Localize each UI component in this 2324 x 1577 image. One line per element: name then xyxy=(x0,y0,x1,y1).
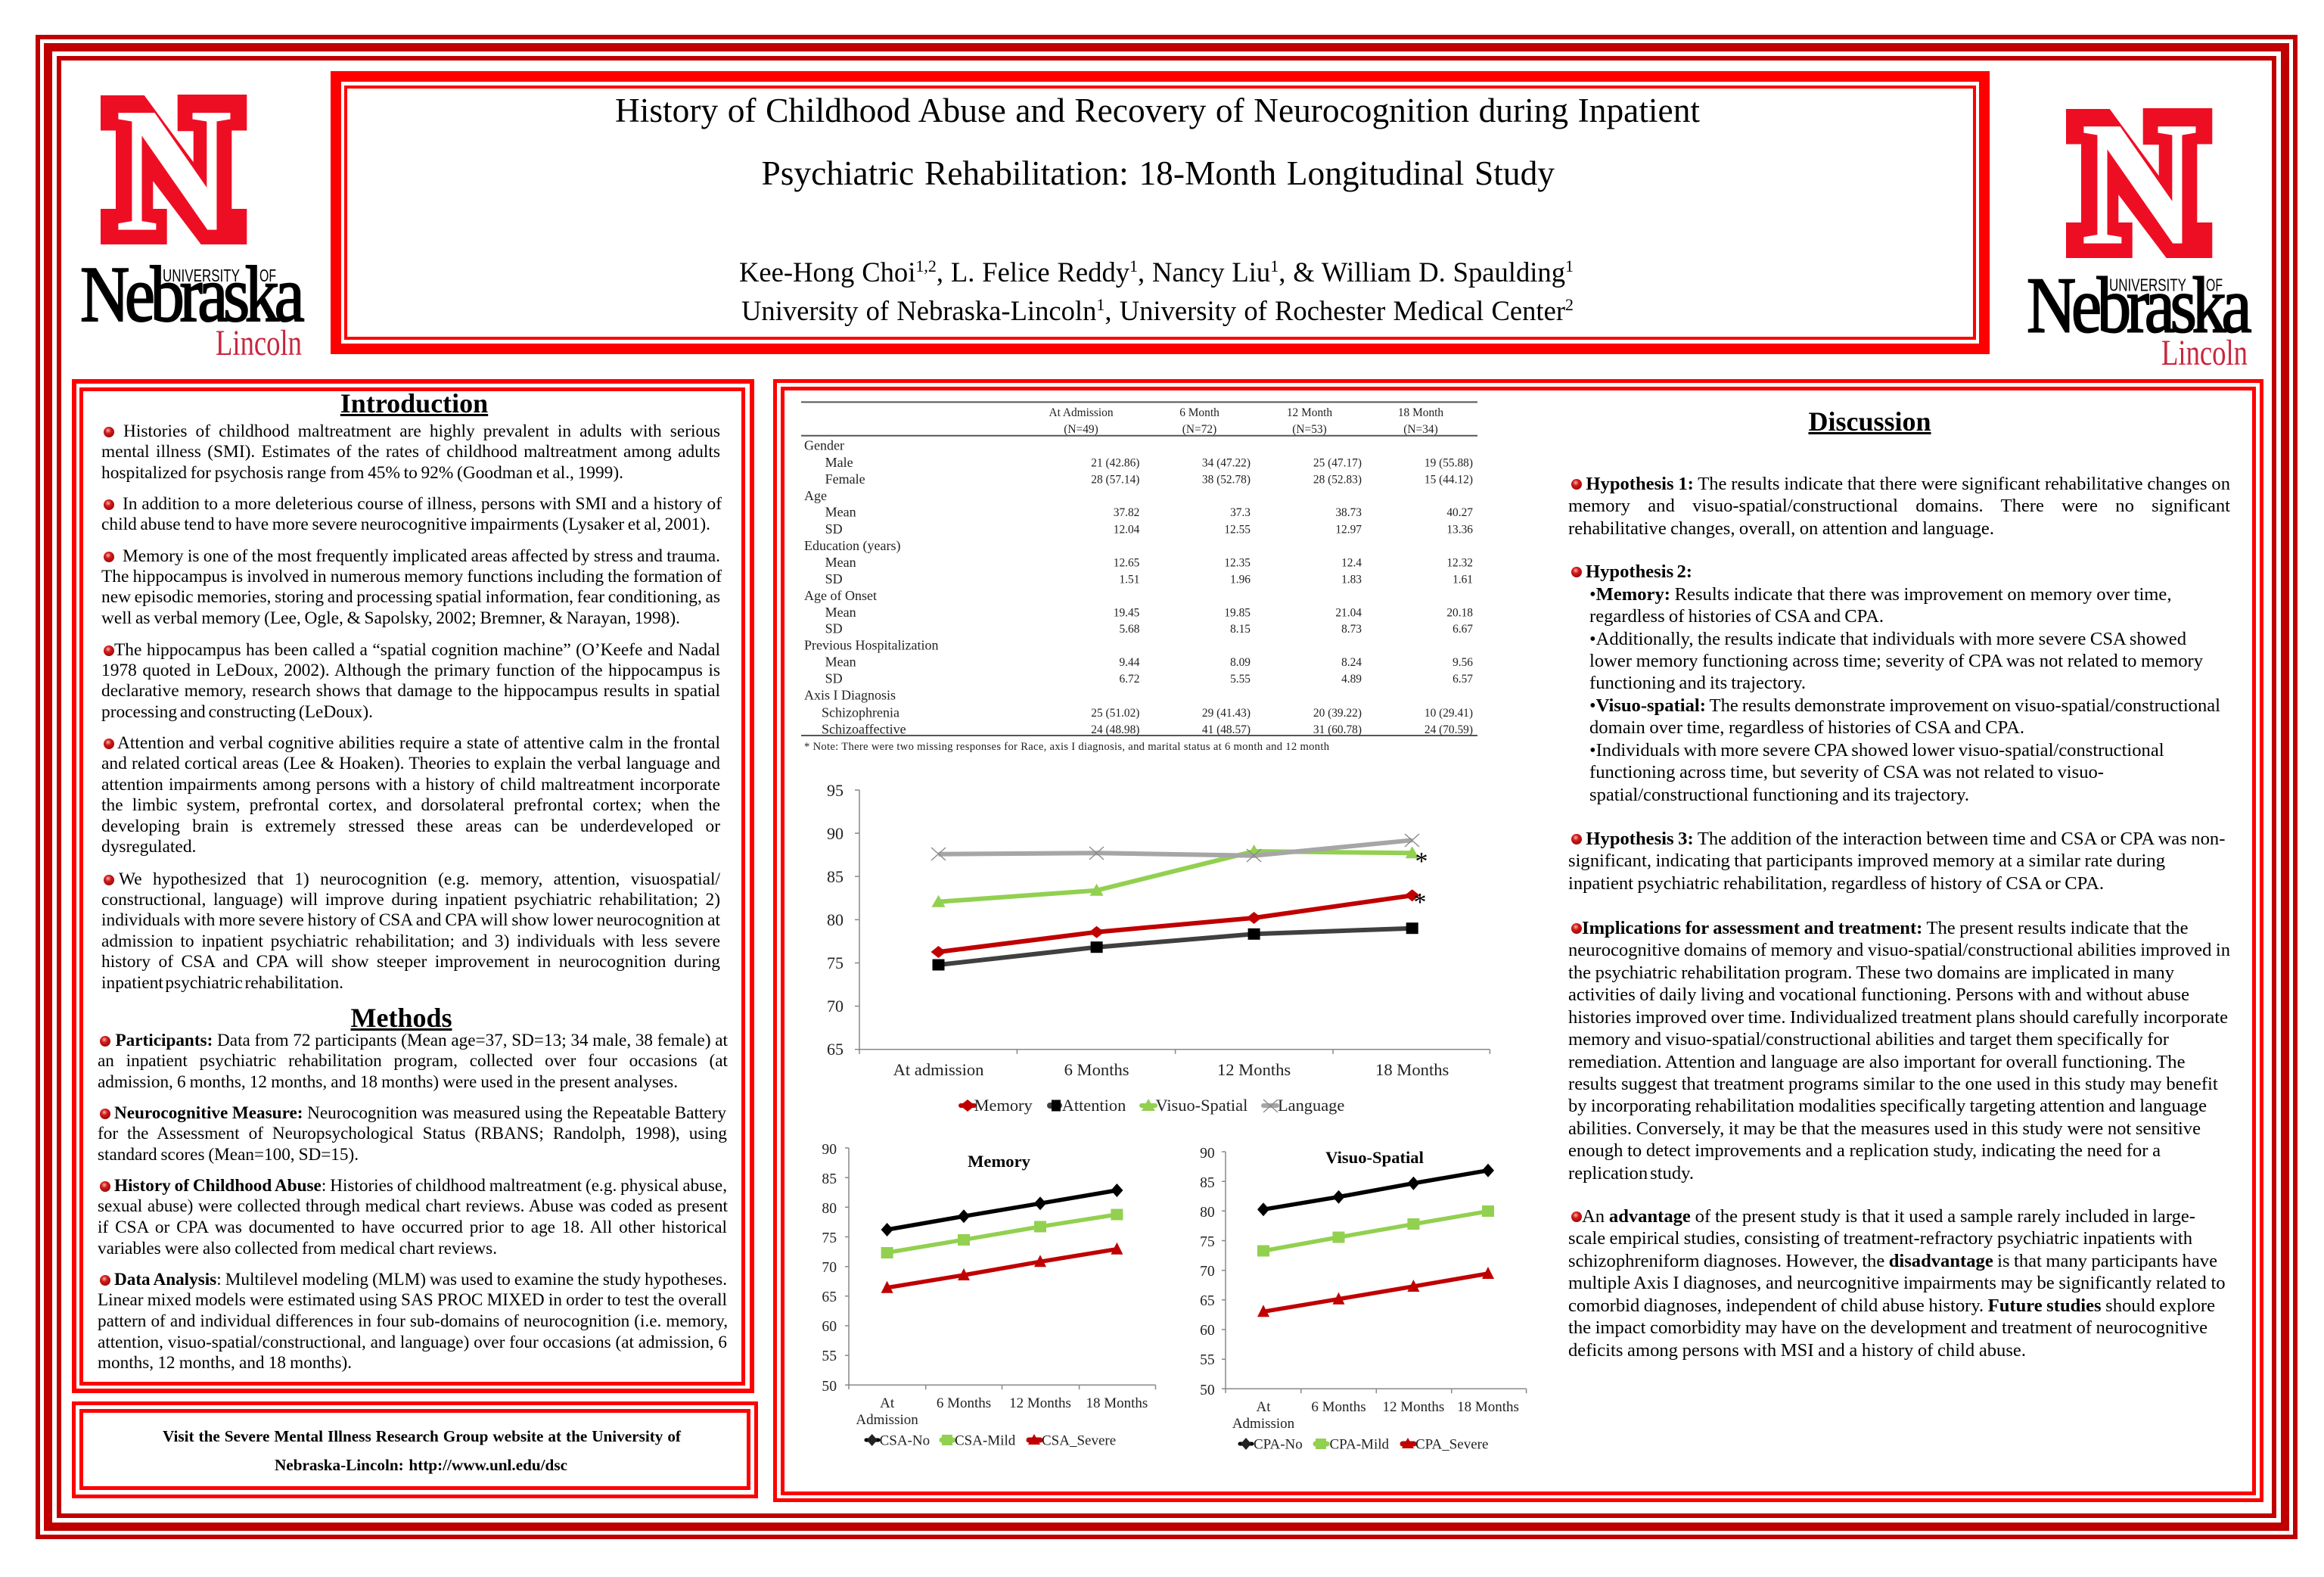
text: intro paragraph 3: new episodic memories, storing and processing spatial information, fear conditioning, as xyxy=(101,587,720,607)
series: CPA-No xyxy=(1257,1164,1494,1216)
table values: at admission: 28 (57.14) xyxy=(1091,473,1139,486)
y axis labels: 90 xyxy=(822,1142,837,1158)
table row labels: SD xyxy=(825,571,843,586)
table values: 12 month: 31 (60.78) xyxy=(1313,723,1362,736)
text: neurocognitive measure: standard scores (Mean=100, SD=15). xyxy=(98,1145,359,1165)
text: intro paragraph 6: individuals with more severe history of CSA and CPA will show lower neurocognition at xyxy=(101,910,720,930)
table header xyxy=(1049,406,1443,436)
text: hypothesis 2: functioning across time, but severity of CSA was not related to visuo- xyxy=(1589,762,2104,782)
heading: Methods: Methods xyxy=(351,1003,452,1033)
text: hypothesis 3: Hypothesis 3: The addition of the interaction between time and CSA or CPA was non- xyxy=(1586,829,2225,849)
text: hypothesis 3 xyxy=(1568,829,2225,894)
text: intro paragraph 3 xyxy=(101,546,722,628)
y axis labels: 75 xyxy=(827,953,844,972)
logo mark: block N: N xyxy=(2080,86,2198,283)
table values: 12 month xyxy=(1313,457,1362,736)
legend: Memory xyxy=(974,1096,1033,1115)
text: intro paragraph 6 xyxy=(101,869,720,993)
text: intro paragraph 4 xyxy=(101,640,720,722)
text: intro paragraph 5: developing brain is extremely stressed these areas can be underdeveloped or xyxy=(101,816,720,836)
line chart: neurocognition by domain xyxy=(827,781,1490,1115)
line chart: memory by CSA severity xyxy=(822,1142,1156,1448)
table values: 6 month: 19.85 xyxy=(1224,606,1251,619)
table row labels: Gender xyxy=(804,437,844,453)
text: advantages and future studies: An advantage of the present study is that it used a sample rarely included in large- xyxy=(1582,1206,2195,1227)
table values: at admission: 24 (48.98) xyxy=(1091,723,1139,736)
table values: at admission: 12.04 xyxy=(1114,524,1140,536)
x axis labels: Admission xyxy=(1232,1416,1295,1432)
text: intro paragraph 6: We hypothesized that 1) neurocognition (e.g. memory, attention, visuospatial/ xyxy=(119,869,720,888)
text: advantages and future studies: schizophreniform diagnoses. However, the disadvantage is that many participants have xyxy=(1568,1251,2217,1271)
table header: At Admission xyxy=(1049,406,1114,419)
table values: 6 month xyxy=(1202,457,1251,736)
text: intro paragraph 6: admission to inpatient psychiatric rehabilitation; and 3) individuals with less severe xyxy=(101,932,720,951)
x axis labels xyxy=(893,1060,1449,1079)
table row labels: Education (years) xyxy=(804,538,900,554)
text: intro paragraph 5: and related cortical areas (Lee & Hoaken). Theories to explain the verbal language and xyxy=(101,754,720,773)
text: intro paragraph 1: hospitalized for psychosis range from 45% to 92% (Goodman et al., 1999). xyxy=(101,463,623,483)
y axis labels: 55 xyxy=(1200,1352,1215,1368)
text: advantages and future studies: comorbid diagnoses, independent of child abuse history. Future studies should explore xyxy=(1568,1296,2215,1316)
text: intro paragraph 4: The hippocampus has been called a “spatial cognition machine” (O’Keefe and Nadal xyxy=(114,640,720,660)
table values: 6 month: 5.55 xyxy=(1230,673,1251,686)
logo mark: block N: N xyxy=(115,72,232,269)
table values: 18 month: 40.27 xyxy=(1446,506,1473,519)
text: intro paragraph 1 xyxy=(101,421,720,483)
table values: at admission: 5.68 xyxy=(1119,623,1140,636)
table values: at admission: 21 (42.86) xyxy=(1091,457,1139,469)
y axis labels: 75 xyxy=(822,1230,837,1246)
table row labels: Axis I Diagnosis xyxy=(804,688,896,703)
heading: Discussion: Discussion xyxy=(1808,406,1931,437)
table values: at admission: 25 (51.02) xyxy=(1091,707,1139,720)
text: implications: activities of daily living and vocational functioning. Persons with and without abuse xyxy=(1568,984,2189,1005)
series: CSA-Mild xyxy=(881,1209,1123,1258)
table header: (N=53) xyxy=(1292,423,1327,436)
text: advantages and future studies: scale empirical studies, consisting of treatment-refractory psychiatric inpatients with xyxy=(1568,1228,2192,1249)
logo wordmark: OF xyxy=(2206,275,2223,295)
legend: CPA-Mild xyxy=(1330,1436,1389,1453)
panel: results and discussion xyxy=(773,379,2263,1502)
text: data analysis xyxy=(98,1270,728,1373)
table values: 12 month: 1.83 xyxy=(1341,574,1362,586)
table header: (N=72) xyxy=(1182,423,1216,436)
text: hypothesis 3: significant, indicating that participants improved memory at a similar rate during xyxy=(1568,851,2165,871)
text: hypothesis 1: rehabilitative changes, overall, on attention and language. xyxy=(1568,518,1994,539)
text: hypothesis 2 xyxy=(1571,561,2220,805)
logo: University of Nebraska-Lincoln, left xyxy=(80,72,305,363)
text: implications: enough to detect improvements and a replication study, indicating the need for a xyxy=(1568,1140,2161,1161)
legend: CSA-Mild xyxy=(955,1433,1016,1448)
text: hypothesis 2: regardless of histories of CSA and CPA. xyxy=(1589,606,1884,627)
text: data analysis: Data Analysis: Multilevel modeling (MLM) was used to examine the study hypotheses. xyxy=(114,1270,727,1289)
table values: 6 month: 8.09 xyxy=(1230,656,1251,669)
y axis labels: 50 xyxy=(822,1379,837,1395)
table values: at admission xyxy=(1091,457,1140,736)
logo wordmark: Lincoln xyxy=(2161,333,2248,373)
text: hypothesis 1: Hypothesis 1: The results indicate that there were significant rehabilitative changes on xyxy=(1586,474,2230,494)
table values: 6 month: 34 (47.22) xyxy=(1202,457,1251,469)
table values: at admission: 37.82 xyxy=(1114,506,1139,519)
text: hypothesis 2: •Visuo-spatial: The results demonstrate improvement on visuo-spatial/constructional xyxy=(1589,695,2220,716)
logo: University of Nebraska-Lincoln, right xyxy=(2027,86,2252,373)
x axis labels: At xyxy=(1256,1399,1271,1415)
table values: 18 month: 9.56 xyxy=(1452,656,1473,669)
y axis labels: 80 xyxy=(822,1201,837,1217)
text: neurocognitive measure xyxy=(98,1103,727,1165)
text: advantages and future studies: deficits among persons with MSI and a history of child abuse. xyxy=(1568,1340,2026,1361)
y axis labels: 70 xyxy=(1200,1264,1215,1280)
table values: at admission: 9.44 xyxy=(1119,656,1140,669)
text: implications: by incorporating rehabilitation modalities specifically targeting attention and language xyxy=(1568,1096,2207,1116)
y axis labels: 50 xyxy=(1200,1383,1215,1398)
chart axes xyxy=(855,790,1490,1054)
text: neurocognitive measure: for the Assessment of Neuropsychological Status (RBANS; Randolph, 1998), using xyxy=(98,1124,727,1143)
table row labels: SD xyxy=(825,521,843,537)
y axis labels: 70 xyxy=(822,1260,837,1276)
text: hypothesis 2: •Memory: Results indicate that there was improvement on memory over time, xyxy=(1589,584,2171,605)
table: participant demographics xyxy=(801,401,1477,753)
y axis labels: 55 xyxy=(822,1348,837,1364)
x axis labels: 12 Months xyxy=(1217,1060,1291,1079)
legend xyxy=(866,1433,1116,1448)
title xyxy=(615,92,1700,192)
text: intro paragraph 3: well as verbal memory (Lee, Ogle, & Sapolsky, 2002; Bremner, & Narayan, 1998). xyxy=(101,608,680,628)
table row labels: Schizoaffective xyxy=(822,722,906,737)
table header: 6 Month xyxy=(1179,406,1219,419)
series: memory xyxy=(931,889,1420,958)
x axis labels: 12 Months xyxy=(1009,1395,1071,1411)
legend: CPA_Severe xyxy=(1415,1436,1488,1453)
table values: at admission: 12.65 xyxy=(1114,557,1140,569)
table values: 6 month: 38 (52.78) xyxy=(1202,473,1251,486)
text: history of childhood abuse: sexual abuse) were collected through medical chart reviews. Abuse was coded as present xyxy=(98,1196,728,1216)
table row labels: SD xyxy=(825,621,843,636)
table values: 18 month: 13.36 xyxy=(1446,524,1473,536)
table values: 12 month: 4.89 xyxy=(1341,673,1362,686)
series: CPA-Mild xyxy=(1257,1205,1494,1256)
legend: CSA-No xyxy=(880,1433,930,1448)
table values: 6 month: 41 (48.57) xyxy=(1202,723,1251,736)
legend: CSA_Severe xyxy=(1042,1433,1116,1448)
chart axes xyxy=(1222,1152,1527,1393)
text: history of childhood abuse xyxy=(98,1176,728,1258)
table values: 12 month: 12.97 xyxy=(1335,524,1362,536)
text: participants: admission, 6 months, 12 months, and 18 months) were used in the present analyses. xyxy=(98,1072,678,1092)
line chart: visuo-spatial by CPA severity xyxy=(1200,1146,1527,1453)
text: neurocognitive measure: Neurocognitive Measure: Neurocognition was measured using the Repeatable Battery xyxy=(114,1103,726,1123)
x axis labels: 6 Months xyxy=(937,1395,991,1411)
legend: Attention xyxy=(1062,1096,1126,1115)
y axis labels: 90 xyxy=(1200,1146,1215,1162)
text: intro paragraph 5: dysregulated. xyxy=(101,837,196,857)
table values: 12 month: 28 (52.83) xyxy=(1313,473,1362,486)
table row labels: Male xyxy=(825,455,853,470)
table rules xyxy=(801,402,1477,736)
table values: 12 month: 8.24 xyxy=(1341,656,1362,669)
y axis labels: 95 xyxy=(827,781,844,800)
text: intro paragraph 6: constructional, language) will improve during inpatient psychiatric rehabilitation; 2) xyxy=(101,890,720,910)
table values: 12 month: 38.73 xyxy=(1335,506,1362,519)
x axis labels xyxy=(1232,1399,1519,1432)
legend: CPA-No xyxy=(1254,1436,1303,1453)
series: visuo-spatial xyxy=(932,844,1419,907)
text: intro paragraph 4: 1978 quoted in LeDoux, 2002). Although the primary function of the hippocampus is xyxy=(101,661,720,680)
table row labels: Age xyxy=(804,488,827,503)
table row labels: Female xyxy=(825,471,865,487)
significance markers xyxy=(1413,848,1428,916)
text: intro paragraph 6: history of CSA and CPA will show steeper improvement in neurocognition during xyxy=(101,952,720,972)
x axis labels: 6 Months xyxy=(1064,1060,1129,1079)
table values: at admission: 1.51 xyxy=(1119,574,1139,586)
text: intro paragraph 2 xyxy=(101,494,722,534)
table values: 12 month: 8.73 xyxy=(1341,623,1362,636)
text: implications: the psychiatric rehabilitation program. These two domains are implicated in many xyxy=(1568,963,2174,983)
text: website link: Visit the Severe Mental Illness Research Group website at the University of xyxy=(163,1427,681,1445)
table header: (N=34) xyxy=(1403,423,1438,436)
table row labels: Mean xyxy=(825,605,856,620)
heading: Introduction: Introduction xyxy=(340,387,488,418)
panel: title block xyxy=(331,71,1990,354)
text: implications: results suggest that treatment programs similar to the one used in this study may benefit xyxy=(1568,1074,2218,1094)
table values: 12 month: 25 (47.17) xyxy=(1313,457,1362,469)
x axis labels: 18 Months xyxy=(1086,1395,1148,1411)
y axis labels: 65 xyxy=(822,1289,837,1305)
logo wordmark: Nebraska xyxy=(2027,262,2252,350)
x axis labels: 6 Months xyxy=(1311,1399,1366,1415)
legend: Visuo-Spatial xyxy=(1156,1096,1247,1115)
y axis labels: 80 xyxy=(827,910,844,929)
text: intro paragraph 4: processing and constructing (LeDoux). xyxy=(101,702,373,722)
text: history of childhood abuse: if CSA or CPA was documented to have occurred prior to age 18. All other historical xyxy=(98,1218,727,1237)
text: data analysis: Linear mixed models were estimated using SAS PROC MIXED in order to test the overall xyxy=(98,1290,727,1310)
chart title: Memory xyxy=(968,1152,1031,1171)
text: website link xyxy=(163,1427,681,1474)
x axis labels: At xyxy=(880,1395,895,1411)
y axis labels: 75 xyxy=(1200,1234,1215,1250)
y axis labels: 70 xyxy=(827,997,844,1016)
logo wordmark: OF xyxy=(259,266,276,285)
text: advantages and future studies: the impact comorbidity may have on the development and treatment of neurocognitive xyxy=(1568,1317,2207,1338)
table row labels: Schizophrenia xyxy=(822,705,899,720)
text: implications: histories improved over time. Individualized treatment plans should carefully incorporate xyxy=(1568,1007,2228,1028)
table row labels: Age of Onset xyxy=(804,588,877,603)
table row labels xyxy=(804,437,938,737)
text: data analysis: pattern of and individual differences in four sub-domains of neurocognition (i.e. memory, xyxy=(98,1311,728,1331)
table values: 6 month: 1.96 xyxy=(1230,574,1251,586)
affiliations: University of Nebraska-Lincoln1, University of Rochester Medical Center2 xyxy=(741,294,1574,326)
text: intro paragraph 2: child abuse tend to have more severe neurocognitive impairments (Lysaker et al, 2001). xyxy=(101,515,710,534)
text: hypothesis 2: domain over time, regardless of histories of CSA and CPA. xyxy=(1589,717,2024,738)
text: hypothesis 2: Hypothesis 2: xyxy=(1586,561,1692,582)
text: intro paragraph 6: inpatient psychiatric rehabilitation. xyxy=(101,973,343,993)
text: hypothesis 2: •Additionally, the results indicate that individuals with more severe CSA showed xyxy=(1589,629,2186,649)
legend xyxy=(960,1096,1344,1115)
y axis labels: 65 xyxy=(827,1040,844,1059)
text: intro paragraph 3: The hippocampus is involved in numerous memory functions including the formation of xyxy=(101,567,722,586)
text: intro paragraph 2: In addition to a more deleterious course of illness, persons with SMI and a history of xyxy=(123,494,722,514)
text: data analysis: attention, visuo-spatial/constructional, and language) over four occasions (at admission, 6 xyxy=(98,1333,727,1352)
text: implications: replication study. xyxy=(1568,1163,1694,1184)
series: attention xyxy=(932,922,1418,970)
text: intro paragraph 1: Histories of childhood maltreatment are highly prevalent in adults with serious xyxy=(123,421,720,441)
table values: 18 month: 19 (55.88) xyxy=(1425,457,1473,469)
table values: 6 month: 37.3 xyxy=(1230,506,1251,519)
table values: 6 month: 12.35 xyxy=(1224,557,1251,569)
text: intro paragraph 5: attention impairments among persons with a history of child maltreatment incorporate xyxy=(101,775,720,795)
table values: at admission: 6.72 xyxy=(1119,673,1139,686)
y axis labels xyxy=(822,1142,837,1395)
table values: 18 month: 6.67 xyxy=(1452,623,1473,636)
table note: * Note: There were two missing responses for Race, axis I diagnosis, and marital status at 6 month and 12 month xyxy=(804,741,1330,753)
significance markers: * xyxy=(1415,848,1428,876)
series: CPA_Severe xyxy=(1257,1267,1494,1317)
series: language xyxy=(931,834,1419,862)
table header: 18 Month xyxy=(1398,406,1443,419)
y axis labels: 85 xyxy=(827,867,844,886)
chart title: Visuo-Spatial xyxy=(1325,1148,1424,1167)
x axis labels: 18 Months xyxy=(1375,1060,1449,1079)
table values: 18 month: 6.57 xyxy=(1452,673,1473,686)
text: hypothesis 2: •Individuals with more severe CPA showed lower visuo-spatial/constructional xyxy=(1589,740,2164,761)
chart axes xyxy=(845,1148,1156,1389)
panel: introduction and methods xyxy=(72,379,754,1393)
table row labels: Mean xyxy=(825,505,856,520)
table values: 6 month: 8.15 xyxy=(1230,623,1251,636)
table values: 18 month: 24 (70.59) xyxy=(1425,723,1473,736)
series: CSA_Severe xyxy=(881,1243,1123,1293)
text: data analysis: months, 12 months, and 18 months). xyxy=(98,1353,352,1373)
text: implications: neurocognitive domains of memory and visuo-spatial/constructional abilities improved in xyxy=(1568,940,2230,960)
y axis labels: 90 xyxy=(827,824,844,843)
table row labels: Mean xyxy=(825,555,856,570)
x axis labels xyxy=(856,1395,1148,1428)
significance markers: * xyxy=(1413,888,1427,916)
y axis labels: 85 xyxy=(1200,1175,1215,1191)
text: participants xyxy=(98,1031,728,1092)
table values: 18 month: 15 (44.12) xyxy=(1425,473,1473,486)
table row labels: Previous Hospitalization xyxy=(804,638,938,653)
x axis labels: Admission xyxy=(856,1412,918,1428)
table values: 6 month: 12.55 xyxy=(1224,524,1251,536)
x axis labels: 12 Months xyxy=(1382,1399,1444,1415)
text: advantages and future studies: multiple Axis I diagnoses, and neurcognitive impairments may be significantly related to xyxy=(1568,1273,2226,1293)
text: advantages and future studies xyxy=(1568,1206,2226,1361)
table values: 6 month: 29 (41.43) xyxy=(1202,707,1251,720)
text: discussion column xyxy=(1568,474,2230,1361)
text: website link: Nebraska-Lincoln: http://www.unl.edu/dsc xyxy=(275,1456,567,1474)
text: hypothesis 1: memory and visuo-spatial/constructional domains. There were no significant xyxy=(1568,496,2230,516)
text: intro paragraph 3: Memory is one of the most frequently implicated areas affected by stress and trauma. xyxy=(123,546,720,566)
logo wordmark: UNIVERSITY xyxy=(163,266,240,285)
text: intro paragraph 5: the limbic system, prefrontal cortex, and dorsolateral prefrontal cortex; when the xyxy=(101,795,720,815)
title: Psychiatric Rehabilitation: 18-Month Longitudinal Study xyxy=(761,154,1555,192)
logo wordmark: UNIVERSITY xyxy=(2109,275,2186,295)
x axis labels: 18 Months xyxy=(1457,1399,1519,1415)
y axis labels: 60 xyxy=(822,1319,837,1335)
logo wordmark: Nebraska xyxy=(80,251,305,339)
text: participants: an inpatient psychiatric rehabilitation program, collected over four occasions (at xyxy=(98,1051,728,1071)
table values: 12 month: 21.04 xyxy=(1335,606,1362,619)
table row labels: SD xyxy=(825,671,843,686)
authors: Kee-Hong Choi1,2, L. Felice Reddy1, Nancy Liu1, & William D. Spaulding1 xyxy=(739,257,1574,288)
text: implications xyxy=(1568,918,2230,1184)
text: intro paragraph 1: mental illness (SMI). Estimates of the rates of childhood maltreatment among adults xyxy=(101,442,720,462)
y axis labels: 85 xyxy=(822,1171,837,1187)
text: hypothesis 1 xyxy=(1568,474,2230,539)
table values: 18 month xyxy=(1425,457,1473,736)
text: implications: memory and visuo-spatial/constructional abilities and target them specifically for xyxy=(1568,1029,2169,1050)
text: hypothesis 3: inpatient psychiatric rehabilitation, regardless of history of CSA or CPA. xyxy=(1568,873,2104,894)
table row labels: Mean xyxy=(825,655,856,670)
legend xyxy=(1240,1436,1488,1453)
y axis labels: 60 xyxy=(1200,1323,1215,1339)
text: hypothesis 2: lower memory functioning across time; severity of CPA was not related to memory xyxy=(1589,651,2203,671)
text: participants: Participants: Data from 72 participants (Mean age=37, SD=13; 34 male, 38 female) at xyxy=(115,1031,728,1050)
table values: 12 month: 20 (39.22) xyxy=(1313,707,1362,720)
series: CSA-No xyxy=(881,1184,1123,1236)
table values: 12 month: 12.4 xyxy=(1341,557,1362,569)
text: history of childhood abuse: variables were also collected from medical chart reviews. xyxy=(98,1239,497,1258)
text: implications: abilities. Conversely, it may be that the measures used in this study were not sensitive xyxy=(1568,1118,2201,1139)
title: History of Childhood Abuse and Recovery of Neurocognition during Inpatient xyxy=(615,92,1700,129)
legend: Language xyxy=(1278,1096,1344,1115)
table values: 18 month: 1.61 xyxy=(1452,574,1473,586)
text: implications: Implications for assessment and treatment: The present results indicate that the xyxy=(1582,918,2188,938)
text: intro paragraph 4: declarative memory, research shows that damage to the hippocampus results in spatial xyxy=(101,681,720,701)
text: intro paragraph 5: Attention and verbal cognitive abilities require a state of attentive calm in the frontal xyxy=(117,733,720,753)
table values: 18 month: 20.18 xyxy=(1446,606,1473,619)
y axis labels xyxy=(1200,1146,1215,1398)
text: hypothesis 2: functioning and its trajectory. xyxy=(1589,673,1806,693)
text: history of childhood abuse: History of Childhood Abuse: Histories of childhood maltreatment (e.g. physical abuse, xyxy=(114,1176,727,1196)
text: hypothesis 2: spatial/constructional functioning and its trajectory. xyxy=(1589,785,1969,805)
text: intro paragraph 5 xyxy=(101,733,720,857)
x axis labels: At admission xyxy=(893,1060,983,1079)
table values: at admission: 19.45 xyxy=(1114,606,1140,619)
y axis labels xyxy=(827,781,844,1059)
table header: (N=49) xyxy=(1064,423,1098,436)
text: implications: remediation. Attention and language are also important for overall functioning. The xyxy=(1568,1052,2185,1072)
table values: 18 month: 12.32 xyxy=(1446,557,1473,569)
table values: 18 month: 10 (29.41) xyxy=(1425,707,1473,720)
table header: 12 Month xyxy=(1287,406,1332,419)
callout: website xyxy=(72,1401,758,1498)
y axis labels: 65 xyxy=(1200,1293,1215,1309)
logo wordmark: Lincoln xyxy=(216,323,302,363)
y axis labels: 80 xyxy=(1200,1205,1215,1221)
